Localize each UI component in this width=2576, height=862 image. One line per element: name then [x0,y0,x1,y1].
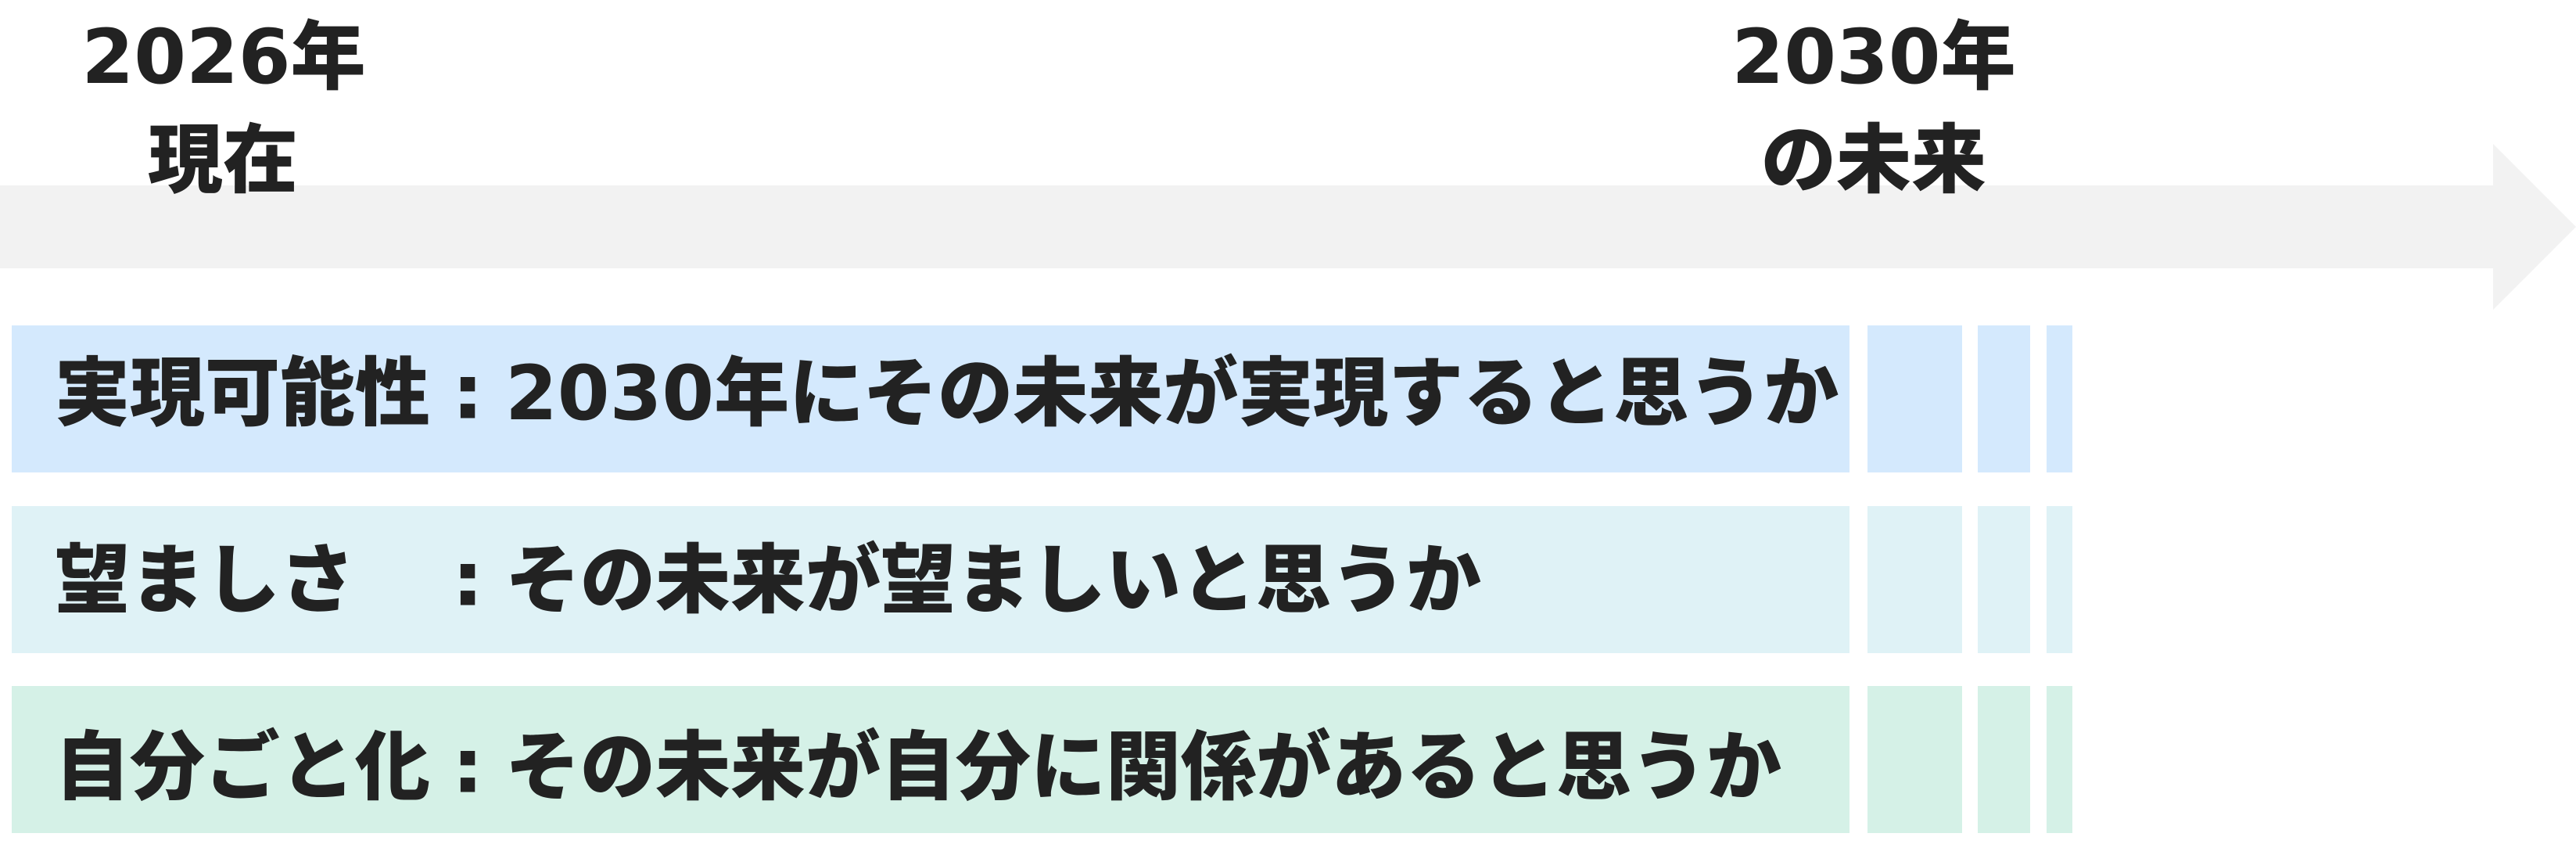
label: 2030 future: 2030年 [1731,13,2016,101]
panel: personal relevance row: 自分ごと化：その未来が自分に関係があると思うか [55,724,1781,811]
label: 2026 present: 2026年 [81,13,366,101]
arrow: timeline [0,144,2576,310]
label: 2026 present: 現在 [148,117,298,204]
panel: personal relevance row [12,686,2072,833]
panel: feasibility row [12,325,2072,472]
panel: feasibility row: 実現可能性：2030年にその未来が実現すると思うか [55,350,1839,437]
label: 2030 future [1731,13,2016,204]
panel: desirability row [12,506,2072,653]
label: 2026 present [81,13,366,204]
panel: desirability row: 望ましさ ：その未来が望ましいと思うか [55,537,1481,624]
label: 2030 future: の未来 [1761,117,1986,204]
